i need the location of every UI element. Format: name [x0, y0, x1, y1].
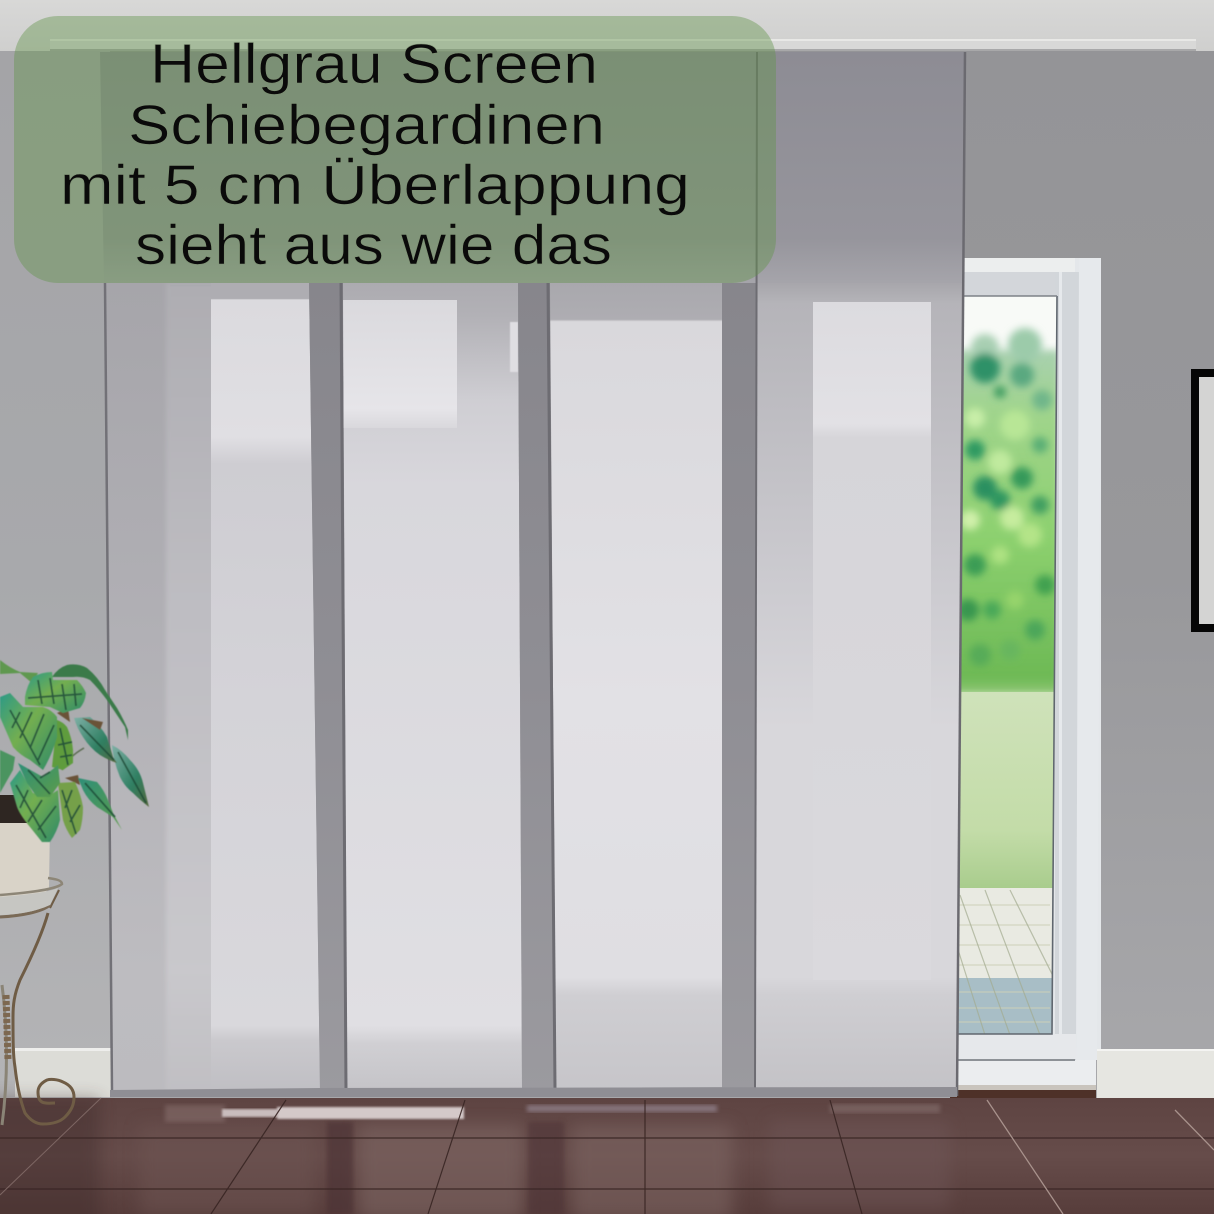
leaf: upper cluster: [25, 672, 86, 713]
lawn: [960, 692, 1054, 888]
potted plant on metal stand: [0, 660, 149, 1125]
leaf: centre: [52, 720, 73, 770]
title text: mit 5 cm Überlappung: [60, 153, 690, 216]
garden view through glass: [950, 296, 1060, 1036]
tiled floor: [0, 1098, 1214, 1214]
title text: Hellgrau Screen: [150, 32, 598, 95]
leaf: main large: [0, 693, 57, 770]
leaf: right lower: [78, 778, 122, 830]
title banner: [14, 16, 776, 283]
door reveal and frame: [950, 258, 1101, 1098]
curtain top section behind banner: [100, 52, 965, 285]
framed picture on right wall: [1191, 369, 1214, 632]
panel 4: [750, 283, 965, 1093]
leaf: lower big: [10, 770, 60, 842]
soil: [0, 795, 27, 825]
glass door with garden view: [950, 258, 1101, 1098]
overlap strip 2: [518, 283, 556, 1090]
leaf: lower right: [58, 782, 83, 838]
panel 1: [100, 283, 323, 1093]
overlap strip 1: [309, 283, 347, 1092]
twigs: [57, 708, 103, 785]
right baseboard: [1097, 1049, 1214, 1098]
floor reflections: [0, 1098, 950, 1214]
leaf: right middle: [74, 717, 117, 763]
title text: Schiebegardinen: [128, 93, 605, 156]
leaf: top left: [0, 660, 38, 683]
leaf: far right: [112, 745, 149, 807]
panel 3: [545, 283, 725, 1093]
paving: [958, 888, 1052, 1034]
leaf stripes: [10, 678, 146, 838]
overlap strip 3: [722, 283, 757, 1090]
leaf: left: [0, 750, 15, 793]
panel 2: [340, 283, 530, 1093]
stand rings: [0, 878, 62, 917]
title text: [60, 32, 690, 276]
leaf: top drooping: [52, 664, 128, 740]
curtain rail: [50, 39, 1196, 51]
title text: sieht aus wie das: [135, 213, 612, 276]
leaf: lower centre: [18, 763, 60, 797]
seams and hem: [341, 52, 757, 1090]
left baseboard: [15, 1048, 115, 1097]
sliding panel curtains: [100, 52, 965, 1097]
curtain right edge: [957, 52, 965, 1096]
plant stand: [2, 890, 74, 1125]
floor tile joints: [0, 1100, 1214, 1214]
banner background: [14, 16, 776, 283]
tree foliage: [961, 324, 1056, 692]
plant leaves: [0, 660, 149, 842]
plant pot: [0, 823, 50, 912]
